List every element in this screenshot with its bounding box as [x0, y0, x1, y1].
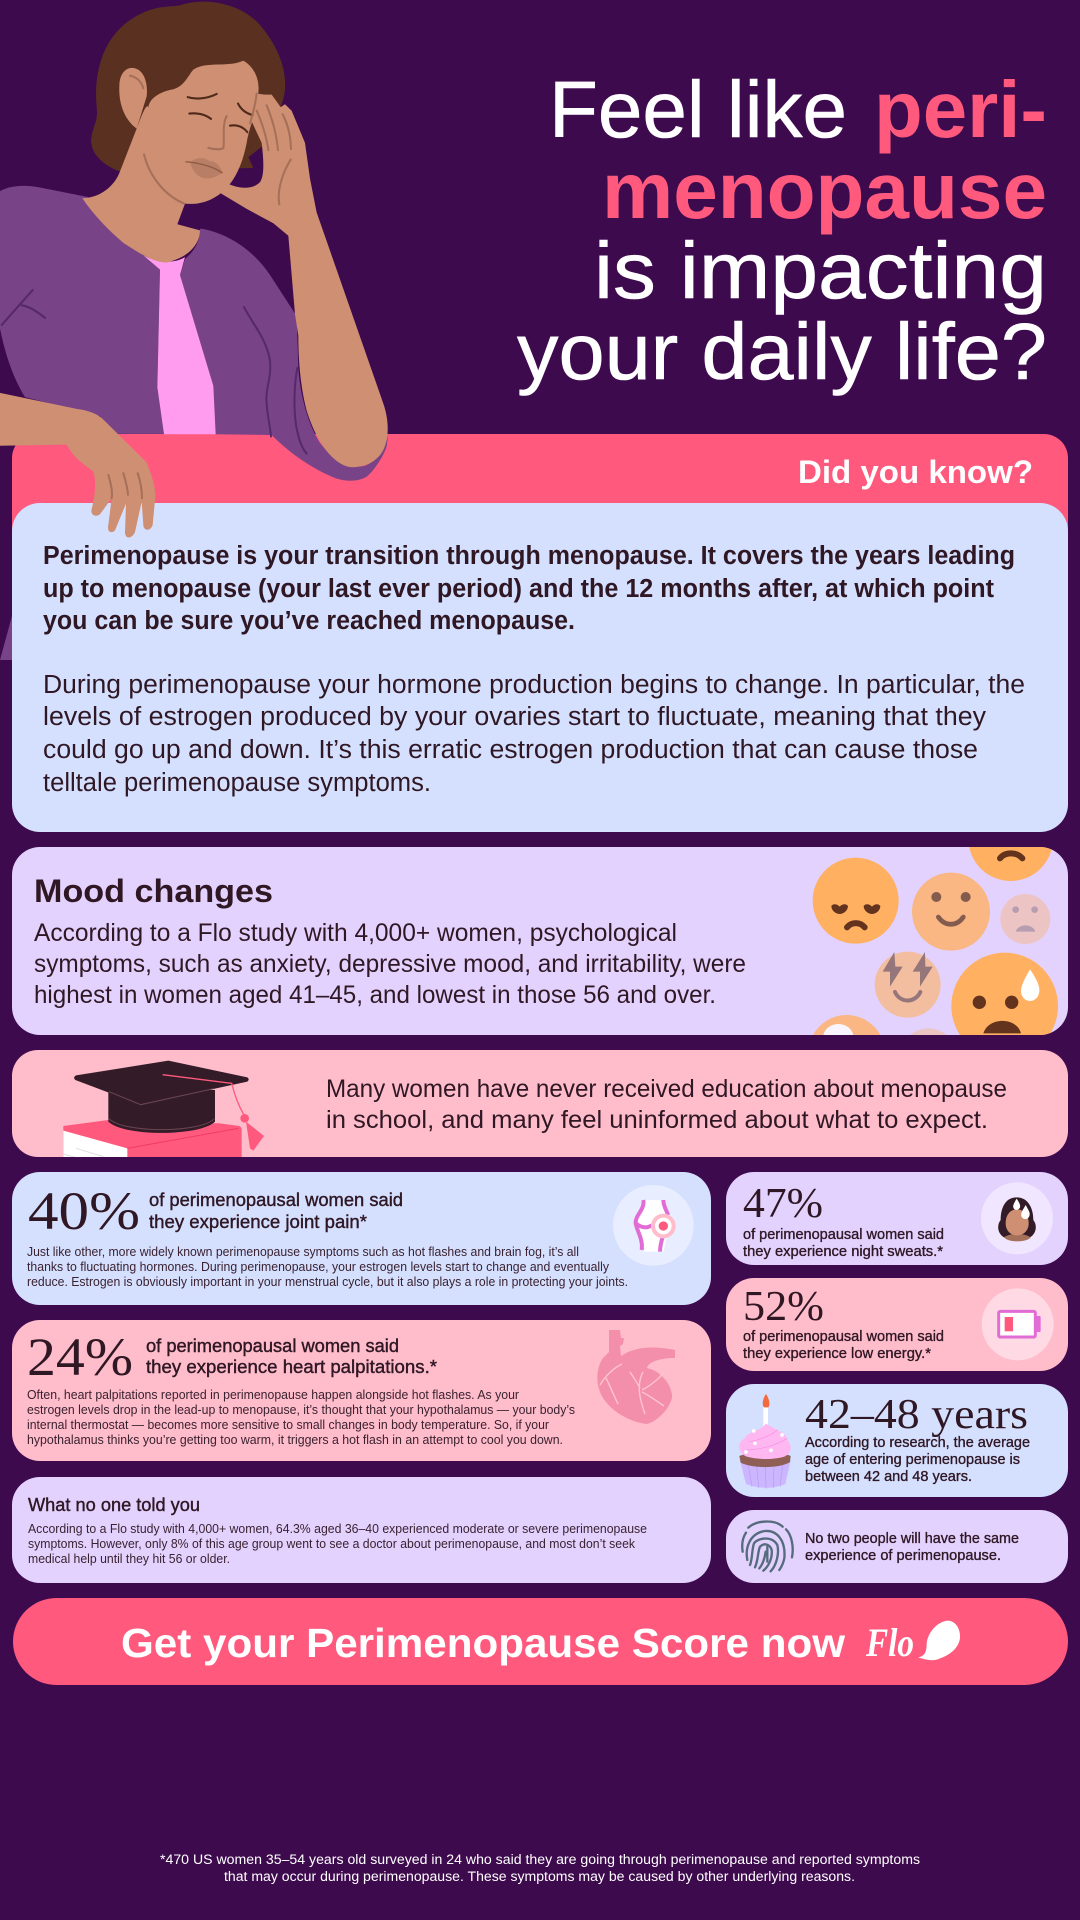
what no one told you body: symptoms. However, only 8% of this age group went to see a doctor about perimenopause, and most don’t seek [28, 1536, 635, 1551]
button background [13, 1598, 1068, 1685]
resting arm and hand [0, 393, 155, 537]
mood heading: Mood changes [34, 873, 273, 909]
joint pain heading [149, 1190, 403, 1232]
icon: knee joint [613, 1185, 694, 1266]
emoji: sweating shocked [951, 952, 1058, 1035]
age text: According to research, the average [805, 1435, 1030, 1451]
panel: joint pain stat [12, 1172, 711, 1305]
panel: age range [726, 1384, 1068, 1497]
age text [805, 1435, 1030, 1485]
heart body: Often, heart palpitations reported in perimenopause happen alongside hot flashes. As your [27, 1387, 520, 1402]
heart heading: they experience heart palpitations.* [146, 1357, 437, 1377]
emoji: lower mid partial [910, 1028, 946, 1035]
stat: 40%: 40% [28, 1181, 140, 1241]
fingerprint text: No two people will have the same [805, 1531, 1019, 1547]
low energy text: of perimenopausal women said [743, 1329, 944, 1345]
stat: 42–48 years: 42–48 years [805, 1392, 1028, 1438]
title: menopause [602, 146, 1047, 235]
emoji: lower left partial [813, 1015, 880, 1035]
night sweats card background [726, 1172, 1068, 1265]
joint pain card background [12, 1172, 711, 1305]
emoji: smile [912, 873, 990, 951]
panel: fingerprint [726, 1510, 1068, 1583]
joint pain heading: they experience joint pain* [149, 1212, 367, 1232]
night sweats text [743, 1227, 944, 1260]
what no one told you body: medical help until they hit 56 or older. [28, 1551, 230, 1566]
bold intro text [43, 542, 1015, 635]
what no one told you body: According to a Flo study with 4,000+ women, 64.3% aged 36–40 experienced moderate or severe perimenopause [28, 1521, 647, 1536]
footnote: *470 US women 35–54 years old surveyed in 24 who said they are going through perimenopause and reported symptoms [160, 1852, 920, 1867]
age text: age of entering perimenopause is [805, 1452, 1020, 1468]
emoji: lightning eyes [875, 952, 941, 1018]
heart card background [12, 1320, 711, 1461]
education text: in school, and many feel uninformed about what to expect. [326, 1106, 988, 1134]
fingerprint text [805, 1531, 1019, 1564]
explanation text: During perimenopause your hormone production begins to change. In particular, the [43, 671, 1025, 699]
icon: anatomical heart [597, 1330, 675, 1424]
title: your daily life? [517, 307, 1047, 396]
icon: books and graduation cap [63, 1061, 264, 1160]
definition card [12, 503, 1068, 832]
call to action button [13, 1598, 1068, 1685]
joint pain heading: of perimenopausal women said [149, 1190, 403, 1210]
mood emoji cluster [812, 847, 1058, 1035]
emoji: faded frown [1000, 894, 1050, 944]
illustration: woman with headache [0, 2, 388, 537]
night sweats text: of perimenopausal women said [743, 1227, 944, 1243]
education text [326, 1075, 1007, 1134]
cardigan right and sleeve [180, 229, 388, 481]
mood body text: highest in women aged 41–45, and lowest in those 56 and over. [34, 981, 716, 1009]
explanation text: telltale perimenopause symptoms. [43, 769, 431, 797]
bold intro text: you can be sure you’ve reached menopause. [43, 607, 575, 635]
icon: low battery [982, 1288, 1054, 1360]
explanation text: levels of estrogen produced by your ovaries start to fluctuate, meaning that they [43, 703, 986, 731]
joint pain body [27, 1244, 628, 1289]
what no one told you card background [12, 1477, 711, 1583]
stat: 24%: 24% [27, 1327, 133, 1387]
joint pain body: reduce. Estrogen is obviously important in your menstrual cycle, but it also plays a role in protecting your joints. [27, 1274, 628, 1289]
mood body text: symptoms, such as anxiety, depressive mood, and irritability, were [34, 950, 746, 978]
panel: education [12, 1050, 1068, 1160]
title: Feel like [549, 65, 847, 154]
panel: night sweats stat [726, 1172, 1068, 1265]
low energy text [743, 1329, 944, 1362]
panel: low energy stat [726, 1278, 1068, 1371]
title [517, 65, 1047, 396]
explanation text: could go up and down. It’s this erratic estrogen production that can cause those [43, 736, 978, 764]
heart body [27, 1387, 575, 1447]
night sweats text: they experience night sweats.* [743, 1244, 943, 1260]
mood card background [12, 847, 1068, 1035]
heart heading [146, 1336, 437, 1377]
heart body: estrogen levels drop in the lead-up to menopause, it’s thought that your hypothalamus — your body’s [27, 1402, 575, 1417]
what no one told you body [28, 1521, 647, 1566]
mood body text [34, 919, 746, 1009]
what no one told you heading: What no one told you [28, 1495, 200, 1515]
raised forearm and hand [220, 94, 388, 467]
panel: mood changes [12, 847, 1068, 1035]
lips [190, 158, 223, 178]
education card background [12, 1050, 1068, 1157]
low energy card background [726, 1278, 1068, 1371]
Flo logo wordmark: Flo [865, 1620, 914, 1665]
icon: cupcake [739, 1394, 791, 1489]
icon: sweating head [981, 1182, 1053, 1254]
facial features [2, 76, 307, 498]
education text: Many women have never received education about menopause [326, 1075, 1007, 1103]
emoji: sad closed eyes [813, 858, 899, 944]
title: peri- [874, 65, 1047, 154]
mood body text: According to a Flo study with 4,000+ women, psychological [34, 919, 677, 947]
title: is impacting [594, 226, 1047, 315]
panel: did you know [12, 434, 1068, 832]
footnote: that may occur during perimenopause. These symptoms may be caused by other underlying reasons. [224, 1869, 855, 1884]
age text: between 42 and 48 years. [805, 1469, 972, 1485]
fingerprint card background [726, 1510, 1068, 1583]
fingerprint text: experience of perimenopause. [805, 1548, 1001, 1564]
hair [91, 2, 285, 171]
bold intro text: Perimenopause is your transition through menopause. It covers the years leading [43, 542, 1015, 570]
bold intro text: up to menopause (your last ever period) and the 12 months after, at which point [43, 575, 994, 603]
ear [119, 68, 147, 129]
illustration: woman's cardigan sliver behind card [0, 616, 12, 660]
explanation text [43, 671, 1025, 797]
icon: fingerprint [742, 1522, 793, 1571]
footnote [160, 1852, 920, 1884]
age card background [726, 1384, 1068, 1497]
stat: 47%: 47% [743, 1181, 823, 1227]
heart body: hypothalamus thinks you’re getting too warm, it triggers a hot flash in an attempt to cool you down. [27, 1432, 563, 1447]
panel: what no one told you [12, 1477, 711, 1583]
button text: Get your Perimenopause Score now [121, 1620, 845, 1666]
shirt [143, 255, 216, 434]
emoji: top frown [969, 847, 1052, 881]
face and neck [82, 61, 259, 262]
panel: heart palpitations stat [12, 1320, 711, 1461]
stat: 52%: 52% [743, 1284, 824, 1330]
heart heading: of perimenopausal women said [146, 1336, 399, 1356]
joint pain body: thanks to fluctuating hormones. During perimenopause, your estrogen levels start to change and eventually [27, 1259, 609, 1274]
did you know header band [12, 434, 1068, 540]
icon: Flo feather logo [918, 1621, 960, 1660]
joint pain body: Just like other, more widely known perimenopause symptoms such as hot flashes and brain fog, it’s all [27, 1244, 579, 1259]
did you know heading: Did you know? [798, 454, 1033, 490]
heart body: internal thermostat — becomes more sensitive to small changes in body temperature. So, if your [27, 1417, 550, 1432]
cardigan left [0, 186, 164, 434]
low energy text: they experience low energy.* [743, 1346, 931, 1362]
